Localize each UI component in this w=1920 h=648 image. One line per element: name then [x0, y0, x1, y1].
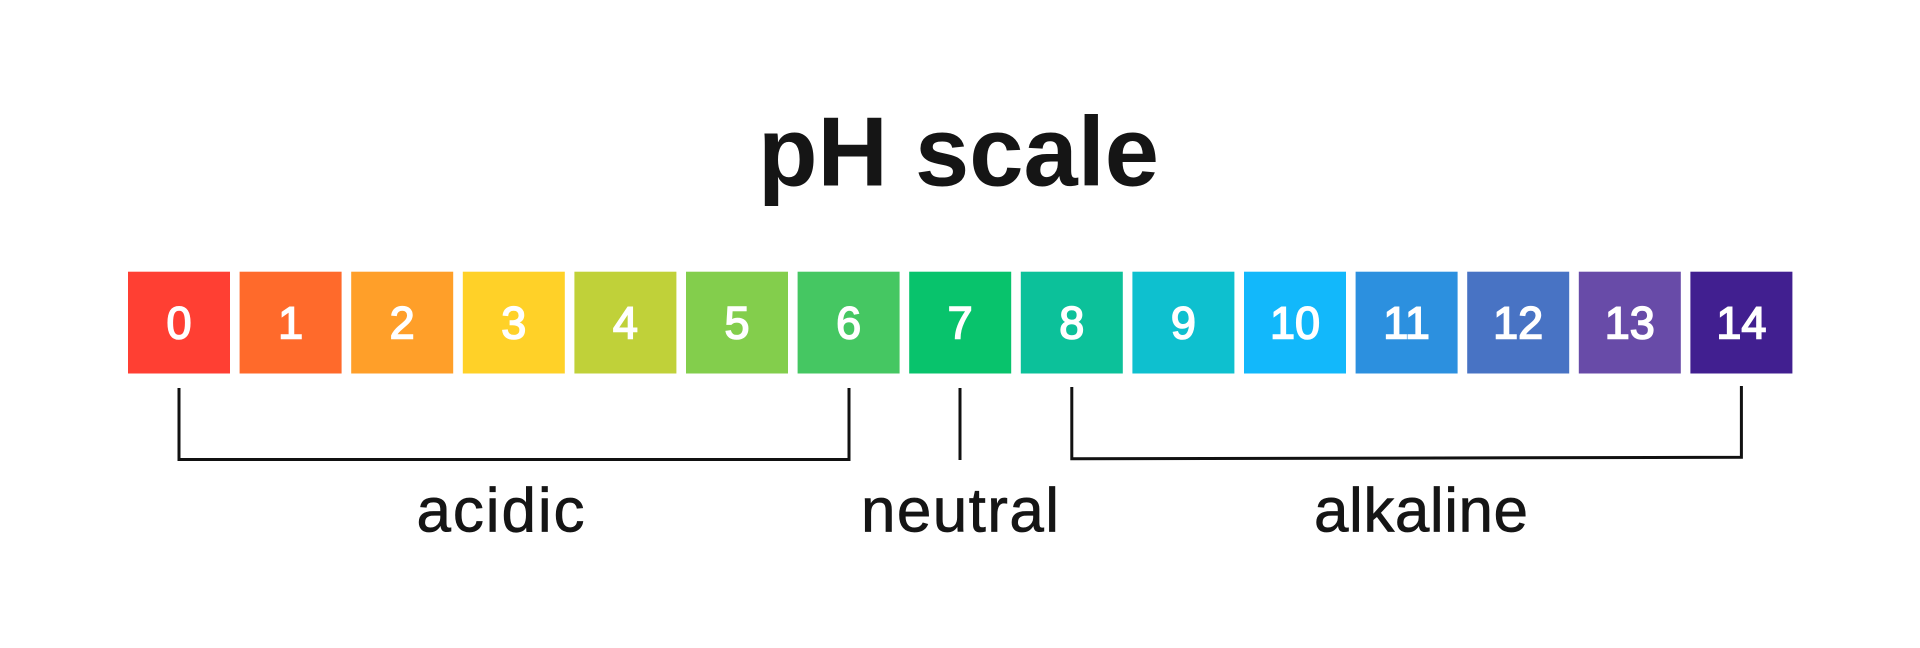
scale bar [128, 272, 1792, 374]
square: pH 0 [128, 272, 230, 374]
square: pH 5 [686, 272, 788, 374]
square: pH 1: 1 [278, 298, 303, 348]
square: pH 11: 11 [1383, 298, 1430, 348]
square: pH 1 [240, 272, 342, 374]
square: pH 2 [351, 272, 453, 374]
square: pH 2: 2 [390, 298, 415, 348]
square: pH 4: 4 [613, 298, 638, 348]
label: alkaline: alkaline [1314, 476, 1528, 546]
square: pH 13: 13 [1605, 298, 1655, 348]
title: pH scale [758, 96, 1159, 206]
square: pH 14: 14 [1716, 298, 1766, 348]
label: neutral: neutral [861, 476, 1059, 546]
square: pH 9 [1132, 272, 1234, 374]
square: pH 4 [574, 272, 676, 374]
label: acidic: acidic [416, 476, 584, 546]
square: pH 9: 9 [1171, 298, 1196, 348]
square: pH 7 [909, 272, 1011, 374]
square: pH 8 [1021, 272, 1123, 374]
bracket: acidic [179, 388, 849, 460]
square: pH 3: 3 [501, 298, 526, 348]
square: pH 7: 7 [948, 298, 973, 348]
square: pH 10 [1244, 272, 1346, 374]
square: pH 12: 12 [1493, 298, 1543, 348]
square: pH 6: 6 [836, 298, 861, 348]
square: pH 5: 5 [724, 298, 750, 348]
bracket: neutral [958, 388, 962, 460]
square: pH 8: 8 [1059, 298, 1084, 348]
square: pH 13 [1579, 272, 1681, 374]
square: pH 6 [798, 272, 900, 374]
square: pH 0: 0 [166, 298, 192, 348]
square: pH 12 [1467, 272, 1569, 374]
square: pH 11 [1356, 272, 1458, 374]
square: pH 3 [463, 272, 565, 374]
square: pH 10: 10 [1270, 298, 1320, 348]
square: pH 14 [1690, 272, 1792, 374]
bracket: alkaline [1072, 386, 1741, 459]
